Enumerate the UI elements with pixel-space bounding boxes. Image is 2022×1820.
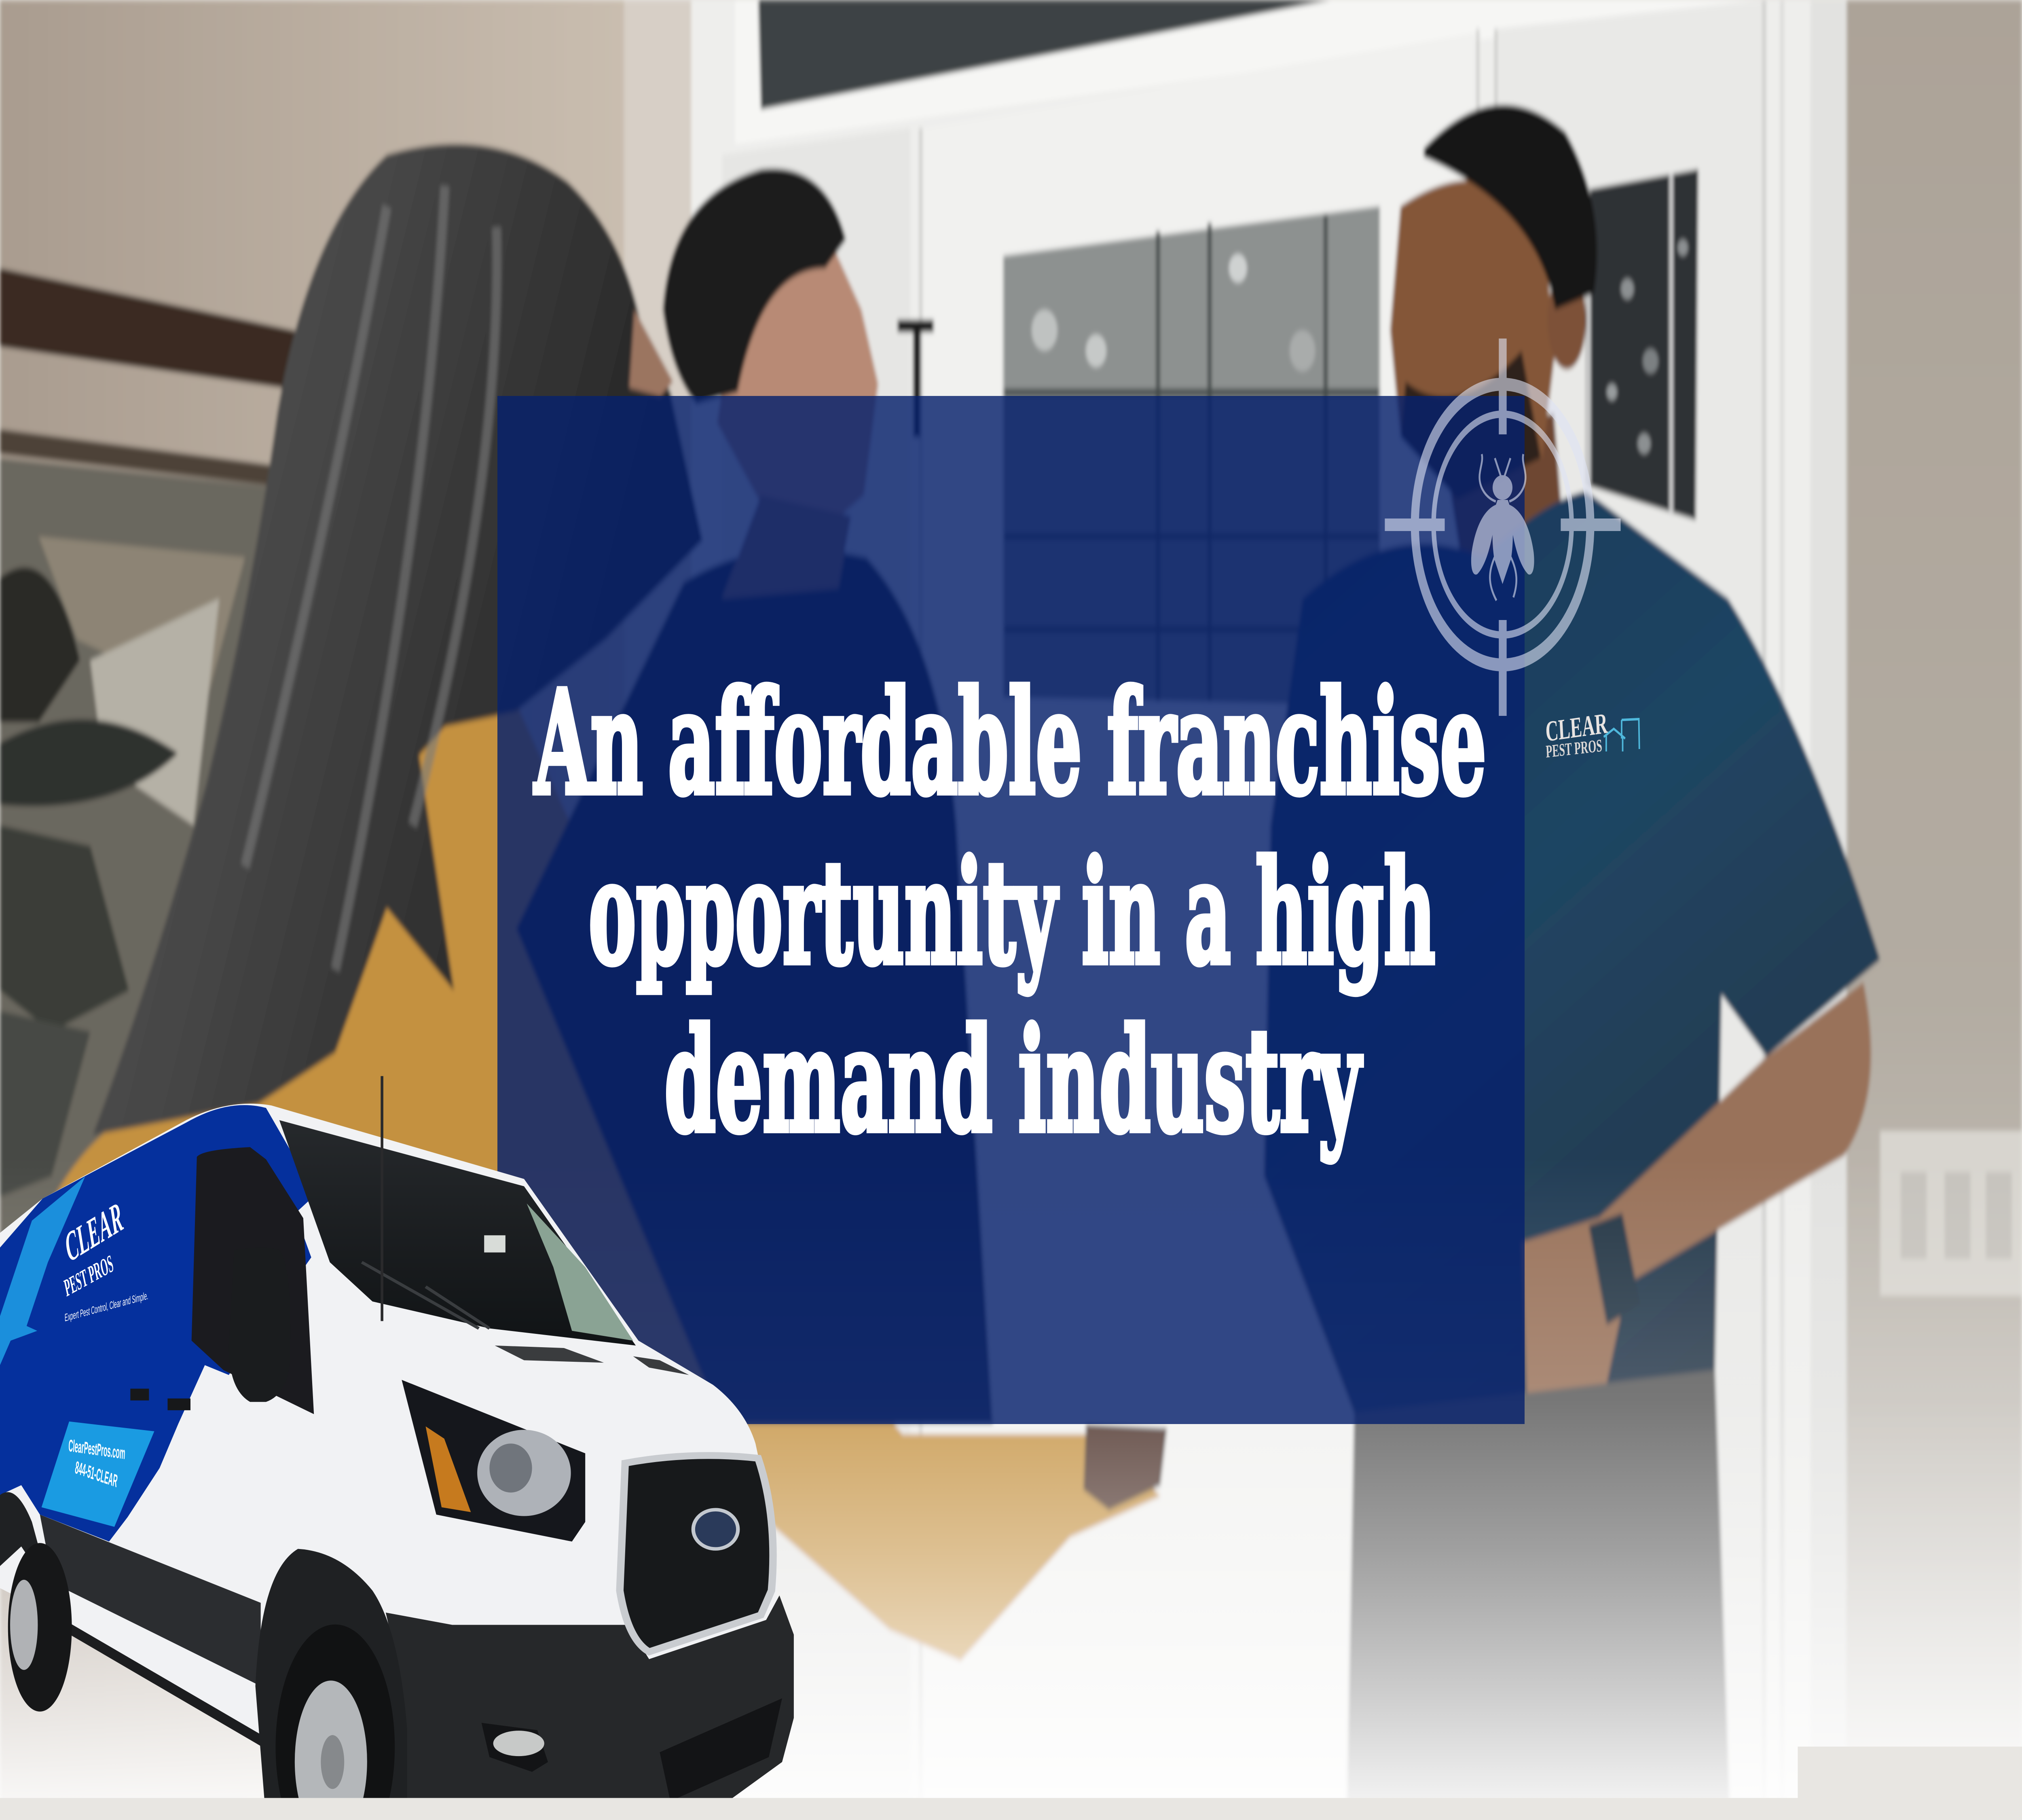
headline [533, 659, 1486, 1164]
van logo and contact text: ClearPestPros.com [68, 1436, 126, 1463]
van logo and contact text: PEST PROS [62, 1250, 115, 1302]
clasped hands [1083, 1424, 1167, 1511]
van: door handles [130, 1395, 190, 1404]
van: front wheel [256, 1549, 407, 1820]
van: headlight [402, 1380, 585, 1542]
van: side mirror [229, 1248, 290, 1402]
van: rear wheel [0, 1492, 72, 1712]
van: blue livery [0, 1105, 311, 1542]
bottom white fade [0, 1157, 2022, 1820]
van: antenna [381, 1076, 383, 1321]
logo printed on technician shirt: CLEAR [1545, 707, 1609, 748]
van: light blue swoosh [0, 1177, 85, 1365]
right wall and light switch [1846, 0, 2022, 1820]
right door window [1586, 169, 1698, 520]
van logo and contact text: CLEAR [61, 1193, 127, 1271]
white front door and frame [624, 0, 1846, 1820]
top transom window [758, 0, 1331, 109]
woman: long dark hair [93, 144, 703, 1135]
van: light blue contact panel [42, 1422, 154, 1527]
logo printed on technician shirt [1545, 707, 1639, 762]
van logo and contact text: 844-51-CLEAR [74, 1457, 118, 1491]
left wall [0, 0, 696, 1820]
van: side window [192, 1147, 314, 1414]
van: white body [0, 1076, 794, 1820]
headline: demand industry [664, 997, 1363, 1164]
logo printed on technician shirt: PEST PROS [1545, 735, 1603, 762]
center technician [516, 168, 993, 1424]
icon: fly in crosshair target [1385, 339, 1621, 716]
woman: yellow top and sleeve [49, 702, 1161, 1661]
van: windshield [279, 1120, 636, 1346]
van: sill [53, 1615, 271, 1752]
van: front bumper [386, 1596, 794, 1820]
van: lower black side band [40, 1515, 261, 1686]
van: hood vents [495, 1346, 689, 1375]
headline panel [497, 396, 1525, 1424]
right technician [1264, 105, 1880, 1820]
van: grille with badge [620, 1456, 773, 1652]
headline: An affordable franchise [533, 659, 1486, 827]
picture frame and painting [0, 268, 312, 1238]
main door window [1003, 206, 1380, 706]
van logo and contact text: Expert Pest Control, Clear and Simple. [64, 1289, 149, 1324]
headline: opportunity in a high [589, 829, 1435, 997]
door handle [897, 326, 934, 438]
van logo and contact text [61, 1193, 149, 1491]
